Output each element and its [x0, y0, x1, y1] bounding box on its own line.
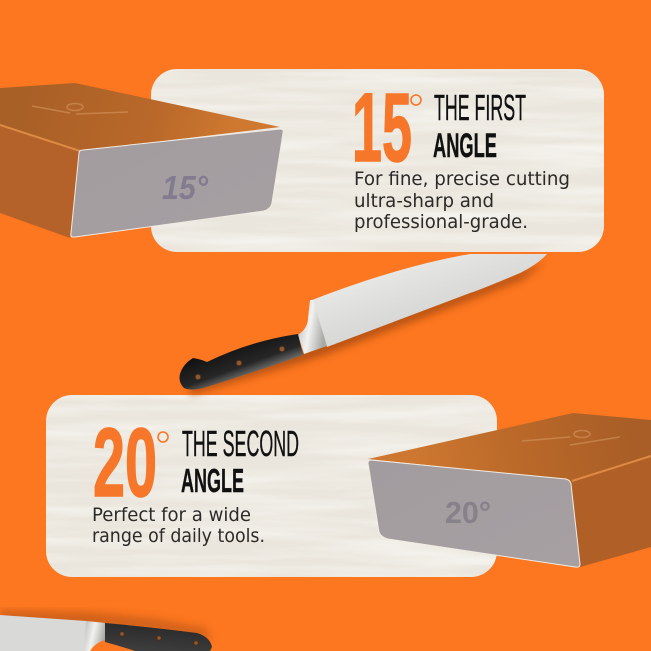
heading: ANGLE: [181, 462, 244, 499]
degree mark: [158, 432, 168, 442]
text: THE SECOND: [182, 423, 299, 464]
text block: 20 degree angle: [92, 408, 299, 547]
knife: centre: [180, 254, 547, 395]
knife shadow: [190, 262, 545, 395]
stone logo: [522, 430, 620, 445]
description: For fine, precise cutting: [354, 168, 570, 190]
stone edge highlight: [0, 125, 80, 151]
heading: ANGLE: [433, 127, 497, 165]
description: [354, 168, 570, 233]
heading: [181, 423, 299, 499]
panel: second angle: [46, 395, 497, 577]
stone angle label: 15°: [162, 169, 209, 206]
big number 15: 15: [352, 73, 412, 182]
description: range of daily tools.: [92, 525, 265, 547]
heading: [433, 87, 526, 165]
knife bolster: [298, 300, 327, 354]
description: Perfect for a wide: [92, 504, 251, 526]
stone side face: [570, 455, 651, 567]
sharpening stone: 15 degree: [0, 83, 283, 238]
knife blade: [0, 615, 86, 651]
text block: 15 degree angle: [352, 73, 570, 233]
sharpening stone: 20 degree: [368, 413, 651, 567]
text block: 15 degree angle: THE FIRST: [434, 87, 526, 128]
knife rivets: [120, 632, 198, 645]
description: professional-grade.: [354, 211, 528, 233]
stone angle label: 20°: [445, 495, 491, 530]
stone top face: [0, 83, 280, 151]
stone logo: [32, 104, 128, 114]
knife shadow: [0, 610, 212, 640]
knife blade: [312, 254, 547, 347]
stone grey face: [368, 460, 580, 567]
stone side face: [0, 124, 80, 238]
panel: first angle: [151, 69, 604, 252]
stone grey face: [71, 129, 283, 237]
stone top face: [368, 413, 651, 480]
big number 20: 20: [93, 408, 157, 517]
degree mark: [411, 95, 421, 105]
knife: bottom cropped: [0, 610, 212, 651]
description: ultra-sharp and: [354, 190, 494, 212]
knife handle: [105, 623, 212, 651]
stone edge highlight: [572, 456, 651, 481]
description: [92, 504, 265, 547]
knife handle: [180, 334, 303, 390]
knife rivets: [195, 346, 285, 380]
knife bolster: [84, 621, 106, 651]
